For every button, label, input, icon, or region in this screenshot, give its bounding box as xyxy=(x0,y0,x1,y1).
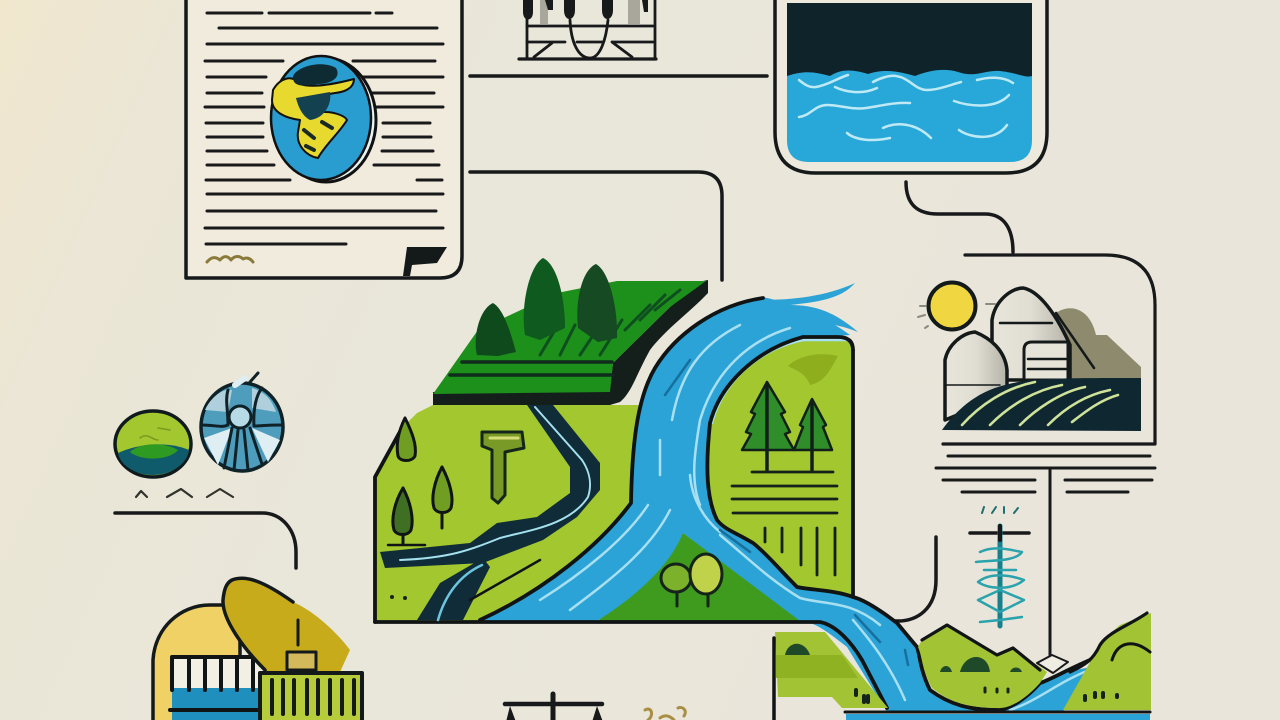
icon: teal pylon xyxy=(970,507,1029,626)
river wisps xyxy=(760,283,858,332)
back hill xyxy=(1056,308,1141,380)
yellow arch xyxy=(153,605,240,720)
panel: silos and sun xyxy=(918,255,1155,444)
left silo xyxy=(945,332,1007,420)
dam gate xyxy=(172,656,262,720)
inner silo xyxy=(1024,342,1068,380)
pine trees right xyxy=(742,382,832,470)
sun xyxy=(928,282,976,330)
lime crate xyxy=(260,673,362,720)
right hill xyxy=(1063,613,1151,710)
center hill xyxy=(918,625,1047,708)
illegible caption scribble xyxy=(645,707,685,720)
panel: farmland river landscape xyxy=(375,258,1097,712)
left field xyxy=(775,632,888,708)
lines below silos xyxy=(936,456,1155,492)
connector lines xyxy=(115,76,1013,621)
panel: lower right river valley xyxy=(774,613,1151,720)
shrubs in meadow xyxy=(661,554,722,606)
river highlights xyxy=(540,325,1095,710)
dark tributary xyxy=(380,405,600,620)
globe icon xyxy=(271,56,376,182)
green meadow triangle xyxy=(597,533,805,622)
icon: segmented water fruit xyxy=(201,373,283,471)
icon: leaf globe left xyxy=(115,411,191,477)
panel: dam building with granary xyxy=(153,578,362,720)
left lime field xyxy=(375,405,670,622)
icon: balance scale xyxy=(505,694,603,720)
field rows right xyxy=(732,472,837,575)
white diamond xyxy=(1037,655,1068,673)
small hut xyxy=(287,652,316,670)
river outline xyxy=(375,298,1097,710)
signature scribble xyxy=(207,256,253,262)
bottom water strip xyxy=(845,710,1150,714)
icon: factory intake top center xyxy=(519,0,656,59)
right lime field xyxy=(700,337,853,610)
panel: water reservoir xyxy=(775,0,1047,173)
dark furrowed ground xyxy=(942,378,1141,431)
panel: document with globe xyxy=(186,0,462,278)
water ripples xyxy=(799,75,1013,140)
elevated green farm plateau xyxy=(433,258,708,405)
small trees left xyxy=(388,418,452,600)
yellow sack xyxy=(223,578,350,672)
plateau trees xyxy=(476,303,516,356)
middle silo xyxy=(992,288,1070,380)
document text lines xyxy=(205,13,443,244)
tower icon xyxy=(482,432,524,503)
icon labels: carets under fruit xyxy=(136,489,233,497)
river main xyxy=(480,297,1097,712)
folded corner mark xyxy=(403,247,447,276)
vertical connector from silos xyxy=(1048,468,1052,655)
